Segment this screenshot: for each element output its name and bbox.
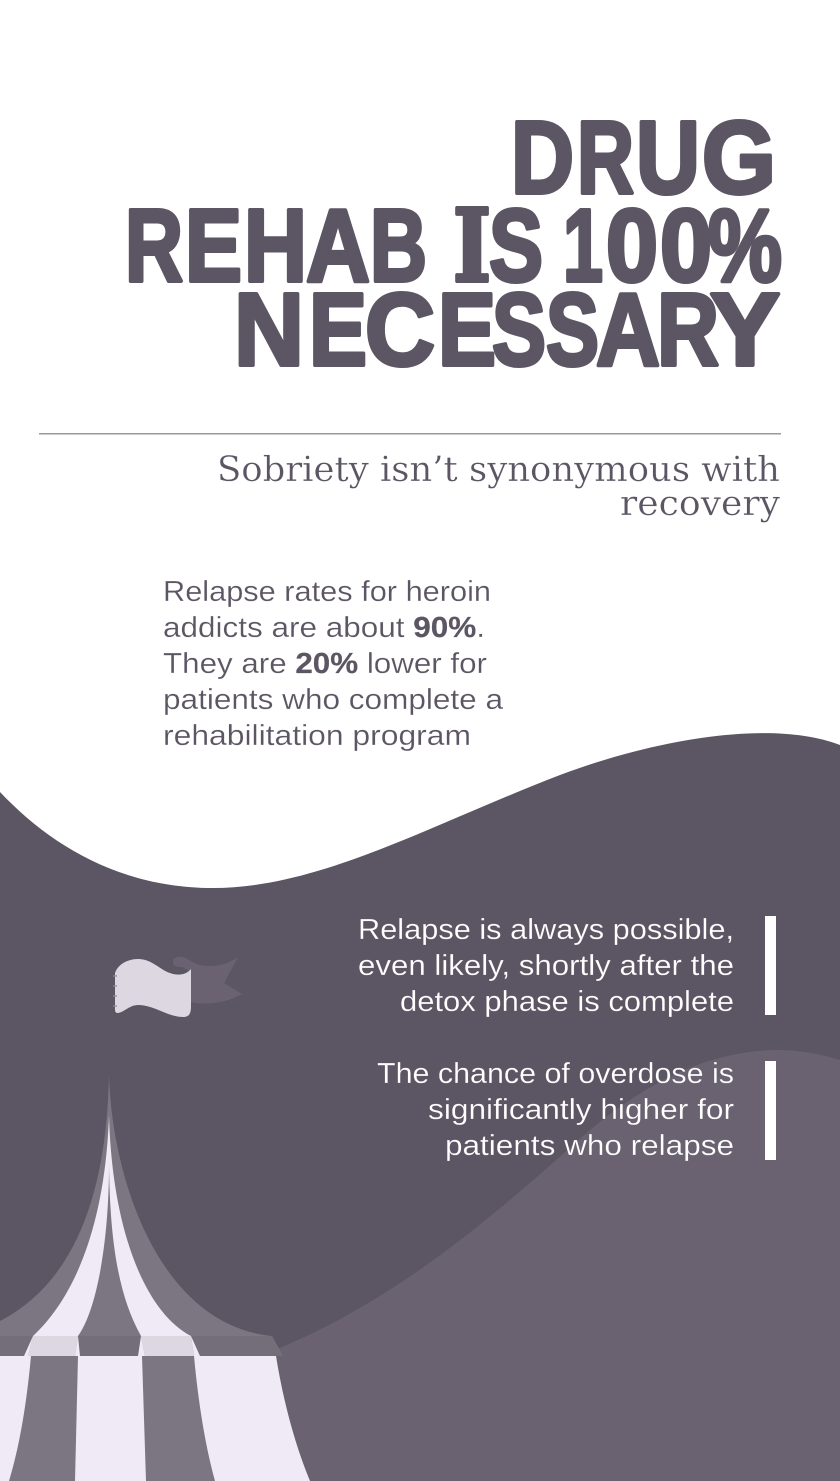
text block: relapse is possible xyxy=(358,914,734,1018)
accent bar 1 xyxy=(765,916,776,1015)
title: U xyxy=(636,100,700,215)
title: Y xyxy=(710,272,780,387)
tent band white slivers xyxy=(24,1336,200,1356)
title: C xyxy=(365,272,435,387)
tent band xyxy=(0,1336,283,1356)
title: S xyxy=(492,272,546,387)
tent lower wall xyxy=(0,1356,310,1481)
text block: relapse rates: Relapse rates for heroin xyxy=(163,576,491,608)
tent lower dark stripes xyxy=(9,1356,215,1481)
title: S xyxy=(489,188,543,303)
title: I xyxy=(453,187,491,305)
text block: relapse is possible: Relapse is always possible, xyxy=(358,914,734,946)
title: R xyxy=(577,100,634,215)
tent band swatches xyxy=(28,1336,194,1356)
text block: relapse rates: They are 20% lower for xyxy=(163,648,487,680)
tent roof outer xyxy=(0,1075,283,1356)
subtitle xyxy=(217,450,780,524)
text block: overdose chance: patients who relapse xyxy=(445,1130,734,1162)
title: H xyxy=(244,188,307,303)
text block: relapse rates: addicts are about 90%. xyxy=(163,612,485,644)
lighter wave background xyxy=(270,1050,840,1481)
text block: relapse is possible: detox phase is complete xyxy=(400,986,734,1018)
text block: overdose chance: The chance of overdose is xyxy=(377,1058,734,1090)
title: B xyxy=(370,188,427,303)
text block: overdose chance: significantly higher for xyxy=(428,1094,734,1126)
title: A xyxy=(306,188,370,303)
title: R xyxy=(125,188,183,303)
subtitle: Sobriety isn’t synonymous with xyxy=(217,450,780,490)
subtitle: recovery xyxy=(620,484,780,524)
text block: relapse rates: rehabilitation program xyxy=(163,720,471,752)
accent bar 2 xyxy=(765,1061,776,1160)
title: 0 xyxy=(660,188,712,303)
title: E xyxy=(309,272,367,387)
title: N xyxy=(234,272,304,387)
title: A xyxy=(596,272,660,387)
title xyxy=(125,100,782,387)
tent roof white stripes xyxy=(33,1115,191,1336)
title: E xyxy=(438,272,496,387)
title: 1 xyxy=(563,188,603,303)
icon: circus tent xyxy=(0,1075,310,1481)
title: 0 xyxy=(606,188,658,303)
text block: overdose chance xyxy=(377,1058,734,1162)
text block: relapse rates xyxy=(163,576,504,752)
text block: relapse rates: patients who complete a xyxy=(163,684,504,716)
title: G xyxy=(702,100,776,215)
text block: relapse is possible: even likely, shortly after the xyxy=(358,950,734,982)
title: D xyxy=(511,100,574,215)
dark wave background xyxy=(0,733,840,1481)
title: % xyxy=(708,188,782,303)
title: S xyxy=(546,272,599,387)
title: E xyxy=(185,188,242,303)
icon: flag xyxy=(113,957,242,1017)
title: R xyxy=(657,272,719,387)
